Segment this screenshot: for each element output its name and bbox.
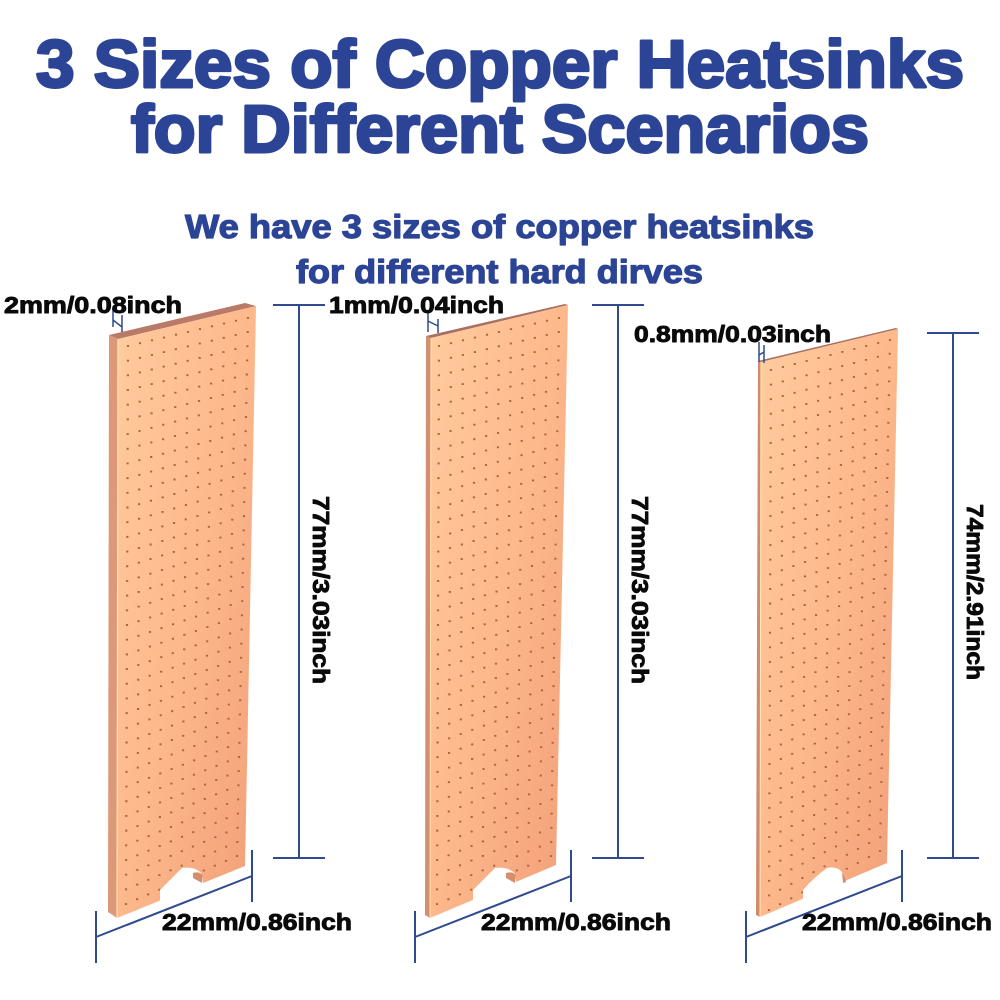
width dimension 2: [415, 850, 571, 963]
title: for Different Scenarios: [131, 92, 869, 167]
label: thickness 1mm: 1mm/0.04inch: [329, 292, 504, 318]
label: thickness 0.8mm: 0.8mm/0.03inch: [634, 321, 831, 347]
label: height 77mm: 77mm/3.03inch: [308, 496, 334, 684]
label: width 22mm first: 22mm/0.86inch: [162, 909, 352, 935]
subtitle: We have 3 sizes of copper heatsinks: [185, 208, 814, 245]
thickness dimension 3: [759, 342, 764, 363]
heatsink 1: 2mm thick: [108, 303, 256, 918]
width dimension 1: [96, 850, 252, 963]
subtitle: [185, 208, 814, 290]
subtitle: for different hard dirves: [296, 253, 703, 290]
thickness dimension 1: [113, 308, 122, 332]
width dimension 3: [746, 850, 902, 963]
heatsink 2: 1mm thick: [425, 304, 568, 918]
title: [36, 27, 964, 167]
heatsink 3: 0.8mm thick: [756, 328, 898, 917]
thickness dimension 2: [428, 313, 438, 333]
title: 3 Sizes of Copper Heatsinks: [36, 27, 964, 102]
height dimension 1: [273, 305, 325, 858]
label: height 77mm second: 77mm/3.03inch: [627, 496, 653, 684]
height dimension 3: [927, 333, 979, 858]
height dimension 2: [592, 305, 644, 858]
label: height 74mm: 74mm/2.91inch: [962, 504, 988, 680]
label: thickness 2mm: 2mm/0.08inch: [4, 292, 182, 318]
label: width 22mm third: 22mm/0.86inch: [802, 909, 992, 935]
label: width 22mm second: 22mm/0.86inch: [481, 909, 671, 935]
